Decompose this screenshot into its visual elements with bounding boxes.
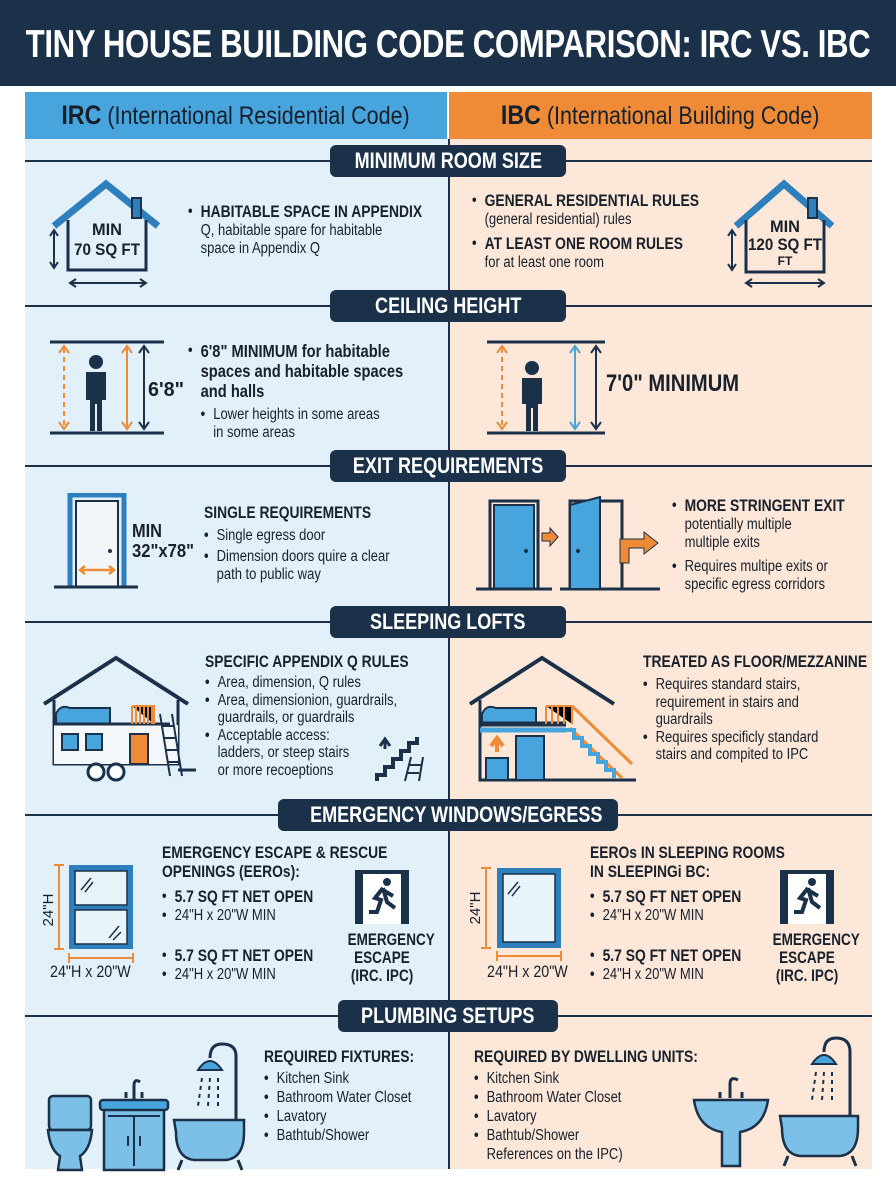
title xyxy=(0,0,896,86)
right background panel xyxy=(449,139,872,1169)
heading: sleeping lofts: SLEEPING LOFTS xyxy=(370,609,526,634)
heading: emergency windows: EMERGENCY WINDOWS/EGRESS xyxy=(310,802,602,827)
text: IBC EEROs: EEROs IN SLEEPING ROOMS xyxy=(590,844,785,862)
text: IBC exit: multiple exits xyxy=(685,534,760,551)
heading: ceiling height xyxy=(330,290,566,322)
text: IBC room size: GENERAL RESIDENTIAL RULES xyxy=(485,192,699,210)
text: IRC exit: path to public way xyxy=(217,566,321,583)
text: IRC plumbing: Bathroom Water Closet xyxy=(277,1089,411,1106)
text: IBC plumbing: Kitchen Sink xyxy=(487,1070,559,1087)
text: IRC lofts: guardrails, or guardrails xyxy=(218,709,354,726)
column header: IBC xyxy=(449,92,872,139)
text: IBC exit: Requires multipe exits or xyxy=(685,558,828,575)
text: IRC plumbing xyxy=(264,1048,414,1144)
text: IRC ceiling: spaces and habitable spaces xyxy=(201,361,403,381)
text: IRC lofts: SPECIFIC APPENDIX Q RULES xyxy=(205,653,409,671)
text: IBC room size: for at least one room xyxy=(485,254,604,271)
text: IRC EEROs: OPENINGS (EEROs): xyxy=(162,863,300,881)
text: IBC EEROs: 24"H x 20"W MIN xyxy=(603,966,704,983)
text: IRC plumbing: Bathtub/Shower xyxy=(277,1127,369,1144)
text: IBC exit xyxy=(672,497,845,593)
text: IRC EEROs: 5.7 SQ FT NET OPEN xyxy=(175,888,313,906)
text: IRC ceiling: Lower heights in some areas xyxy=(213,406,380,423)
text: IRC lofts xyxy=(205,653,409,778)
text: IBC lofts: Requires standard stairs, xyxy=(656,676,800,693)
title: TINY HOUSE BUILDING CODE COMPARISON: IRC VS. IBC xyxy=(26,23,870,66)
heading: emergency windows xyxy=(278,799,618,831)
text: IRC exit: SINGLE REQUIREMENTS xyxy=(204,504,371,522)
column header: IRC: IRC (International Residential Code) xyxy=(62,100,410,130)
icon: window IRC xyxy=(40,864,134,963)
heading: minimum room size xyxy=(330,145,566,177)
text: IRC EEROs: 24"H x 20"W MIN xyxy=(175,966,276,983)
text: IBC plumbing: References on the IPC) xyxy=(487,1146,623,1163)
text: window IRC dimensions: 24"H x 20"W xyxy=(50,962,131,981)
icon: emergency exit sign IRC: (IRC. IPC) xyxy=(351,967,413,985)
text: IBC EEROs: IN SLEEPINGi BC: xyxy=(590,863,710,881)
text: IRC plumbing: Lavatory xyxy=(277,1108,327,1125)
heading: minimum room size: MINIMUM ROOM SIZE xyxy=(354,148,542,173)
heading: plumbing setups xyxy=(338,1000,558,1032)
text: IBC plumbing: REQUIRED BY DWELLING UNITS: xyxy=(474,1048,698,1066)
text: IBC lofts: stairs and compited to IPC xyxy=(656,746,808,763)
text: IRC room size: HABITABLE SPACE IN APPENDIX xyxy=(201,203,422,221)
icon: emergency exit sign IBC: EMERGENCY xyxy=(773,931,860,949)
icon: window IRC: 24"H xyxy=(40,894,57,926)
icon: stairs and ladder xyxy=(375,736,424,782)
icon: single door: MIN xyxy=(132,521,162,541)
text: IRC lofts: Area, dimension, Q rules xyxy=(218,674,361,691)
icon: house 120 sq ft: 120 SQ FT xyxy=(748,235,823,254)
icon: house 70 sq ft: MIN xyxy=(92,220,122,239)
icon: emergency exit sign IBC xyxy=(773,870,860,985)
icon: emergency exit sign IRC: ESCAPE xyxy=(354,949,410,967)
text: IRC room size: space in Appendix Q xyxy=(201,240,320,257)
heading: plumbing setups: PLUMBING SETUPS xyxy=(361,1003,535,1028)
icon: emergency exit sign IRC: EMERGENCY xyxy=(348,931,435,949)
heading: exit requirements xyxy=(330,450,566,482)
icon: ceiling 7'0 xyxy=(487,340,605,434)
text: window IBC dimensions: 24"H x 20"W xyxy=(487,962,568,981)
text: IRC lofts: ladders, or steep stairs xyxy=(218,744,349,761)
icon: house with mezzanine and stairs xyxy=(469,656,636,782)
icon: emergency exit sign IBC: ESCAPE xyxy=(779,949,835,967)
text: IBC EEROs: 5.7 SQ FT NET OPEN xyxy=(603,947,741,965)
text: IRC ceiling: in some areas xyxy=(213,424,295,441)
left background panel xyxy=(25,139,449,1169)
text: IRC EEROs: 5.7 SQ FT NET OPEN xyxy=(175,947,313,965)
text: IRC room size xyxy=(188,203,422,257)
icon: house 70 sq ft xyxy=(49,180,160,288)
text: IRC EEROs: EMERGENCY ESCAPE & RESCUE xyxy=(162,844,387,862)
text: IRC EEROs: 24"H x 20"W MIN xyxy=(175,907,276,924)
text: IBC lofts: requirement in stairs and xyxy=(656,694,799,710)
text: IBC plumbing xyxy=(474,1048,698,1163)
heading: sleeping lofts xyxy=(330,606,566,638)
text: IBC EEROs xyxy=(590,844,785,983)
text: IRC lofts: or more recoeptions xyxy=(218,762,333,778)
text: IBC lofts: guardrails xyxy=(656,711,713,728)
text: IBC room size: AT LEAST ONE ROOM RULES xyxy=(485,235,683,253)
text: IBC exit: MORE STRINGENT EXIT xyxy=(685,497,845,515)
icon: toilet, vanity, bathtub xyxy=(46,1042,246,1172)
text: IBC room size xyxy=(472,192,699,271)
icon: house 120 sq ft: MIN xyxy=(770,217,800,236)
text: IBC plumbing: Bathroom Water Closet xyxy=(487,1089,621,1106)
text: IBC plumbing: Lavatory xyxy=(487,1108,537,1125)
text: IBC lofts: TREATED AS FLOOR/MEZZANINE xyxy=(643,653,867,671)
icon: emergency exit sign IBC: (IRC. IPC) xyxy=(776,967,838,985)
text: IBC plumbing: Bathtub/Shower xyxy=(487,1127,579,1144)
icon: house 70 sq ft: 70 SQ FT xyxy=(74,240,141,259)
icon: house 120 sq ft xyxy=(727,180,834,288)
text: IRC plumbing: Kitchen Sink xyxy=(277,1070,349,1087)
text: IRC plumbing: REQUIRED FIXTURES: xyxy=(264,1048,414,1066)
icon: pedestal sink and bathtub xyxy=(692,1036,860,1168)
text: IRC ceiling xyxy=(188,341,403,441)
text: IBC EEROs: 24"H x 20"W MIN xyxy=(603,907,704,924)
icon: multiple doors with arrows xyxy=(476,496,660,590)
text: IRC lofts: Acceptable access: xyxy=(218,726,330,744)
icon: single door xyxy=(54,493,194,588)
text: IBC lofts xyxy=(643,653,867,763)
column header: IBC: IBC (International Building Code) xyxy=(501,100,820,130)
icon: window IBC xyxy=(470,867,562,961)
heading: ceiling height: CEILING HEIGHT xyxy=(375,293,521,318)
text: IBC ceiling 7'0: 7'0" MINIMUM xyxy=(606,370,739,397)
heading: exit requirements: EXIT REQUIREMENTS xyxy=(353,453,543,478)
text: IRC ceiling: 6'8" MINIMUM for habitable xyxy=(201,341,390,361)
icon: ceiling 6'8: 6'8" xyxy=(148,379,184,401)
column header: IRC xyxy=(25,92,447,139)
text: IBC lofts: Requires specificly standard xyxy=(656,728,818,746)
icon: single door: 32"x78" xyxy=(132,541,194,561)
icon: emergency exit sign IRC xyxy=(348,870,435,985)
text: IRC exit: Single egress door xyxy=(217,527,325,544)
text: IRC room size: Q, habitable spare for habitable xyxy=(201,222,382,239)
text: IBC exit: specific egress corridors xyxy=(685,576,825,593)
icon: house 120 sq ft: FT xyxy=(778,254,793,268)
text: IRC ceiling: and halls xyxy=(201,381,264,401)
text: IBC exit: potentially multiple xyxy=(685,516,792,533)
text: IRC exit: Dimension doors quire a clear xyxy=(217,548,390,565)
text: IBC EEROs: 5.7 SQ FT NET OPEN xyxy=(603,888,741,906)
text: IRC exit xyxy=(204,504,390,583)
icon: tiny house on wheels with loft xyxy=(43,656,196,782)
text: IRC EEROs xyxy=(162,844,387,983)
text: IRC lofts: Area, dimensionion, guardrails, xyxy=(218,692,397,708)
icon: ceiling 6'8 xyxy=(50,340,184,434)
text: IBC room size: (general residential) rules xyxy=(485,211,632,228)
